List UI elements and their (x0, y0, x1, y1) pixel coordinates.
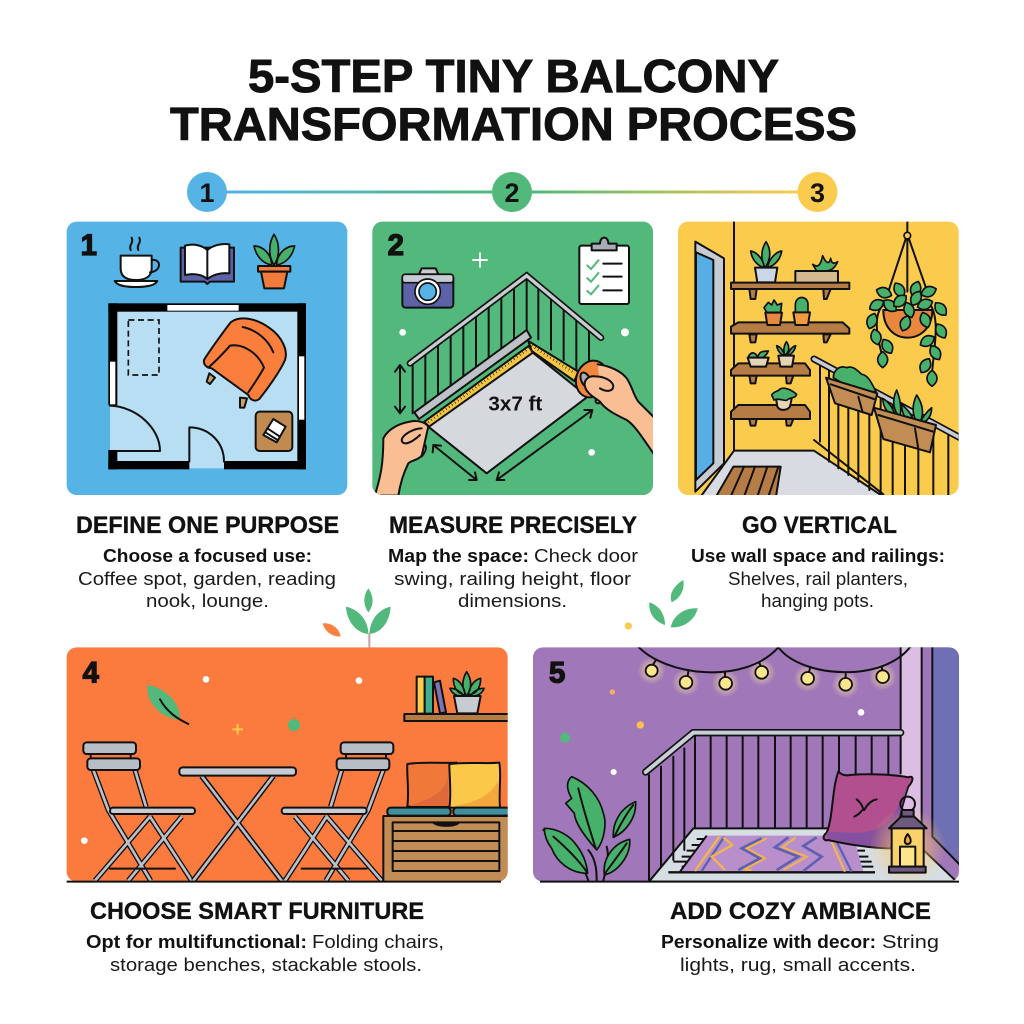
text: step 1 caption (76, 512, 339, 611)
text: step 1 caption: nook, lounge. (146, 590, 269, 611)
dots (560, 689, 864, 775)
text: step 5 caption: Personalize with decor: (661, 931, 876, 952)
title: 5-STEP TINY BALCONY (248, 50, 779, 102)
floor and mat (701, 451, 883, 497)
step timeline (187, 172, 838, 212)
lantern (869, 797, 946, 885)
panel: step 4 choose smart furniture (67, 647, 513, 886)
balcony door (695, 222, 734, 492)
text: step 5 caption: lights, rug, small accents. (680, 954, 916, 975)
step timeline: 3 (810, 178, 825, 208)
panel: step 3 go vertical (678, 222, 960, 497)
panel: step 2 measure precisely: 2 (388, 229, 404, 262)
text: step 2 caption (388, 512, 638, 611)
armchair (204, 318, 286, 408)
text: step 4 caption (86, 898, 444, 975)
wall column (901, 647, 962, 867)
text: step 1 caption: Choose a focused use: (103, 545, 312, 566)
shelf plants (748, 242, 838, 410)
step timeline: 1 (199, 178, 215, 208)
text: step 4 caption: Opt for multifunctional: (86, 931, 307, 952)
text: step 5 caption (661, 898, 939, 975)
floor plan (108, 303, 306, 469)
decorative sprig right (625, 580, 698, 630)
dimension label: 3x7 ft (488, 394, 543, 416)
title: TRANSFORMATION PROCESS (170, 98, 857, 150)
string lights (637, 645, 912, 698)
text: step 3 caption (691, 512, 945, 611)
text: step 2 caption: dimensions. (458, 590, 567, 611)
text: step 5 caption: ADD COZY AMBIANCE (670, 898, 931, 925)
step timeline: 2 (504, 178, 520, 208)
icon: coffee cup (115, 238, 159, 287)
panel: step 1 define one purpose: 1 (81, 229, 97, 262)
panel: step 5 add cozy ambiance (533, 645, 962, 885)
text: step 3 caption: Use wall space and railings: (691, 545, 945, 566)
text: step 4 caption: Folding chairs, (312, 931, 444, 952)
rail planter right (874, 390, 936, 452)
text: step 4 caption: CHOOSE SMART FURNITURE (90, 898, 424, 925)
text: step 5 caption: String (882, 931, 939, 952)
hanging planter (865, 222, 950, 386)
storage bench (383, 763, 513, 886)
ground line (540, 879, 959, 885)
text: step 1 caption: DEFINE ONE PURPOSE (76, 512, 339, 539)
rail planter left (826, 367, 877, 415)
floor cushion (824, 772, 912, 848)
panel: step 4 choose smart furniture: 4 (83, 657, 100, 690)
right chair (282, 742, 393, 881)
wall shelf with books and plant (404, 672, 511, 721)
panel: step 2 measure precisely (372, 222, 656, 496)
panel: step 5 add cozy ambiance: 5 (549, 657, 565, 690)
text: step 3 caption: Shelves, rail planters, (728, 568, 908, 589)
text: step 3 caption: hanging pots. (761, 590, 874, 611)
icon: potted plant (254, 234, 295, 288)
right hand with tape roll (574, 360, 653, 454)
text: step 2 caption: Check door (534, 545, 638, 566)
left chair (83, 742, 195, 881)
left hand (375, 421, 428, 496)
dimension arrows (395, 365, 592, 480)
bistro table (179, 767, 296, 881)
text: step 2 caption: MEASURE PRECISELY (389, 512, 637, 539)
text: step 2 caption: Map the space: (388, 545, 529, 566)
floor (649, 828, 957, 882)
icon: camera (402, 268, 453, 308)
decorative sprig left (323, 588, 391, 647)
sparkles (399, 252, 629, 456)
floating leaf and dots (81, 676, 362, 844)
side table (256, 412, 292, 451)
ground line (67, 879, 501, 885)
railing (646, 733, 901, 880)
text: step 1 caption: Coffee spot, garden, reading (78, 568, 336, 589)
text: step 3 caption: GO VERTICAL (742, 512, 897, 539)
title (170, 50, 857, 150)
icon: open book (181, 244, 234, 284)
plant (543, 777, 636, 881)
patterned rug (668, 836, 875, 872)
shelves (731, 283, 849, 426)
text: step 2 caption: swing, railing height, floor (394, 568, 631, 589)
icon: checklist clipboard (579, 238, 629, 304)
railing (410, 276, 601, 413)
text: step 4 caption: storage benches, stackable stools. (110, 954, 422, 975)
railing (814, 359, 960, 497)
floor with tape measure (414, 330, 588, 473)
panel: step 1 define one purpose (67, 222, 347, 495)
